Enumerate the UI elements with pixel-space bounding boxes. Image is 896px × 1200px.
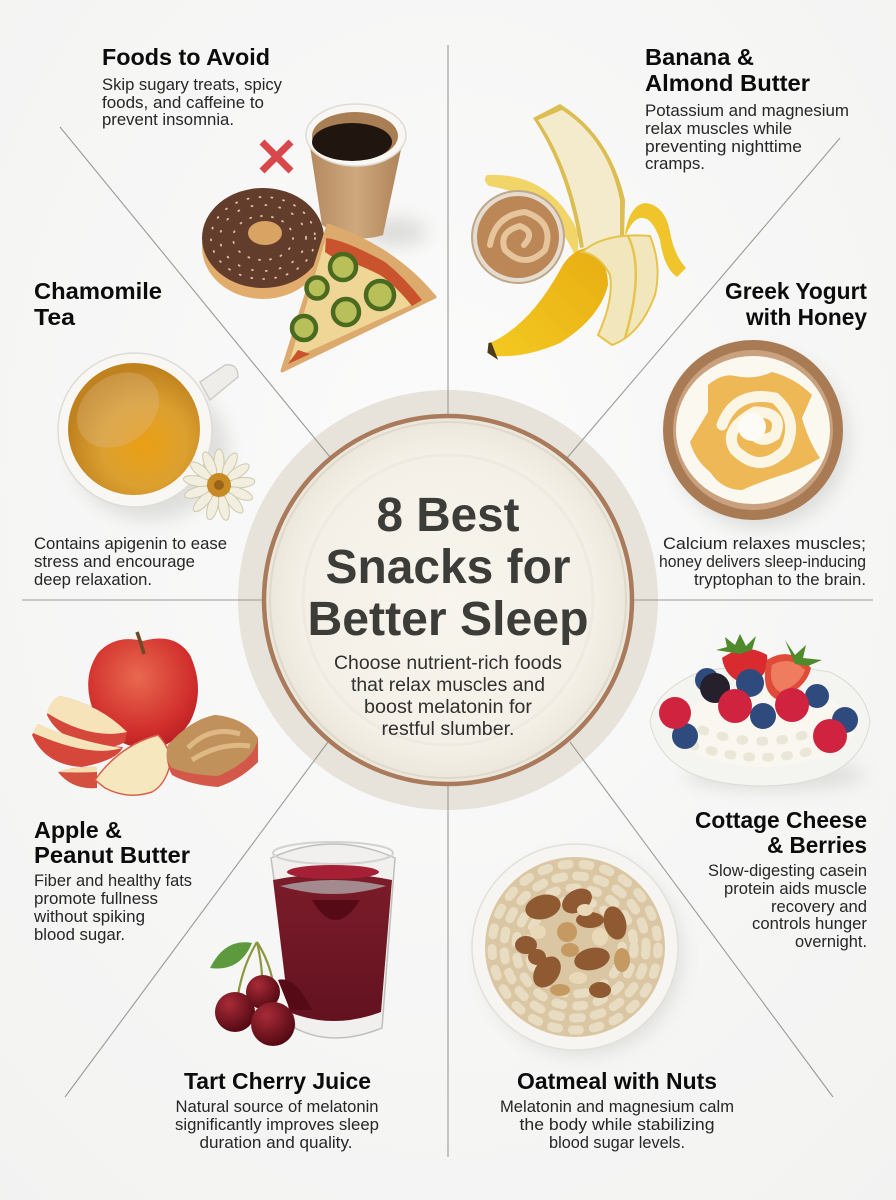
subtitle: Choose nutrient-rich foods [334, 653, 562, 674]
text: banana: Potassium and magnesium [645, 102, 849, 120]
panel: oatmeal with nuts [472, 844, 734, 1152]
icon: tea cup [58, 353, 238, 520]
icon: yogurt bowl [663, 340, 848, 528]
heading: yogurt: with Honey [745, 304, 867, 330]
subtitle: that relax muscles and [351, 675, 545, 696]
heading: apple: Apple & [34, 817, 122, 843]
text: banana: preventing nighttime [645, 138, 802, 156]
panel: chamomile tea [34, 278, 255, 589]
heading: cherry: Tart Cherry Juice [184, 1068, 371, 1094]
icon: berry bowl [650, 634, 870, 789]
icon: juice glass [271, 842, 395, 1038]
text: yogurt: tryptophan to the brain. [694, 571, 866, 589]
panel: apple and peanut butter [32, 632, 258, 944]
text: apple: Fiber and healthy fats [34, 872, 192, 890]
heading: banana: Banana & [645, 44, 754, 70]
text: banana: relax muscles while [645, 120, 792, 138]
icon: pizza [282, 225, 435, 371]
icon: cherries [210, 942, 295, 1046]
text: chamomile: stress and encourage [34, 553, 195, 571]
subtitle [334, 653, 562, 740]
heading: cottage cheese: & Berries [767, 832, 867, 858]
text: chamomile: deep relaxation. [34, 571, 152, 589]
text: cottage cheese: recovery and [771, 898, 867, 916]
icon: oatmeal bowl [472, 844, 682, 1055]
panel: foods to avoid [102, 44, 435, 371]
text: cottage cheese: overnight. [795, 933, 867, 951]
panel: tart cherry juice [175, 842, 395, 1152]
icon: red cross [262, 142, 291, 171]
text: apple: without spiking [33, 908, 145, 926]
text: yogurt [659, 535, 866, 589]
text: cherry: Natural source of melatonin [176, 1098, 378, 1116]
subtitle: restful slumber. [382, 719, 514, 740]
text: cherry [175, 1098, 379, 1152]
panel: greek yogurt [659, 278, 867, 589]
icon: banana [485, 104, 686, 356]
text: cherry: duration and quality. [200, 1134, 352, 1152]
heading: chamomile: Tea [34, 304, 76, 330]
heading: banana [645, 44, 810, 96]
text: oatmeal: the body while stabilizing [520, 1116, 714, 1134]
text: banana: cramps. [645, 155, 705, 173]
panel: banana and almond butter [472, 44, 849, 356]
icon: apple [32, 632, 258, 795]
icon: donut [202, 188, 324, 299]
heading: banana: Almond Butter [645, 70, 810, 96]
text: apple: promote fullness [34, 890, 158, 908]
title: Better Sleep [308, 593, 588, 646]
icon: coffee cup [306, 104, 427, 246]
text: cottage cheese [708, 862, 867, 951]
central plate [264, 416, 632, 784]
heading: foods to avoid: Foods to Avoid [102, 44, 270, 70]
text: yogurt: Calcium relaxes muscles; [663, 535, 866, 553]
heading: yogurt: Greek Yogurt [725, 278, 867, 304]
text: chamomile: Contains apigenin to ease [34, 535, 227, 553]
text: apple [33, 872, 192, 944]
text: banana [645, 102, 849, 173]
text: chamomile [34, 535, 227, 589]
text: oatmeal: blood sugar levels. [549, 1134, 685, 1152]
text: foods to avoid: prevent insomnia. [102, 111, 234, 129]
subtitle: boost melatonin for [364, 697, 533, 718]
icon: daisy [183, 449, 255, 521]
heading: apple [34, 817, 190, 868]
panel: cottage cheese and berries [650, 634, 870, 951]
title: Snacks for [326, 541, 570, 594]
text: foods to avoid [102, 76, 283, 129]
text: cherry: significantly improves sleep [175, 1116, 379, 1134]
heading: chamomile [34, 278, 162, 330]
text: yogurt: honey delivers sleep-inducing [659, 553, 866, 571]
heading: chamomile: Chamomile [34, 278, 162, 304]
title [308, 489, 588, 646]
heading: oatmeal: Oatmeal with Nuts [517, 1068, 717, 1094]
heading: cottage cheese: Cottage Cheese [695, 807, 867, 833]
text: cottage cheese: Slow-digesting casein [708, 862, 867, 880]
title: 8 Best [376, 489, 520, 542]
icon: almond butter jar [472, 191, 564, 283]
plate outer ring [238, 390, 658, 810]
heading: yogurt [725, 278, 867, 330]
text: foods to avoid: Skip sugary treats, spicy [102, 76, 283, 94]
heading: apple: Peanut Butter [34, 842, 190, 868]
text: oatmeal [500, 1098, 734, 1152]
text: cottage cheese: protein aids muscle [724, 880, 867, 898]
text: cottage cheese: controls hunger [752, 915, 867, 933]
text: apple: blood sugar. [34, 926, 125, 944]
text: oatmeal: Melatonin and magnesium calm [500, 1098, 734, 1116]
text: foods to avoid: foods, and caffeine to [102, 94, 264, 112]
heading: cottage cheese [695, 807, 867, 858]
